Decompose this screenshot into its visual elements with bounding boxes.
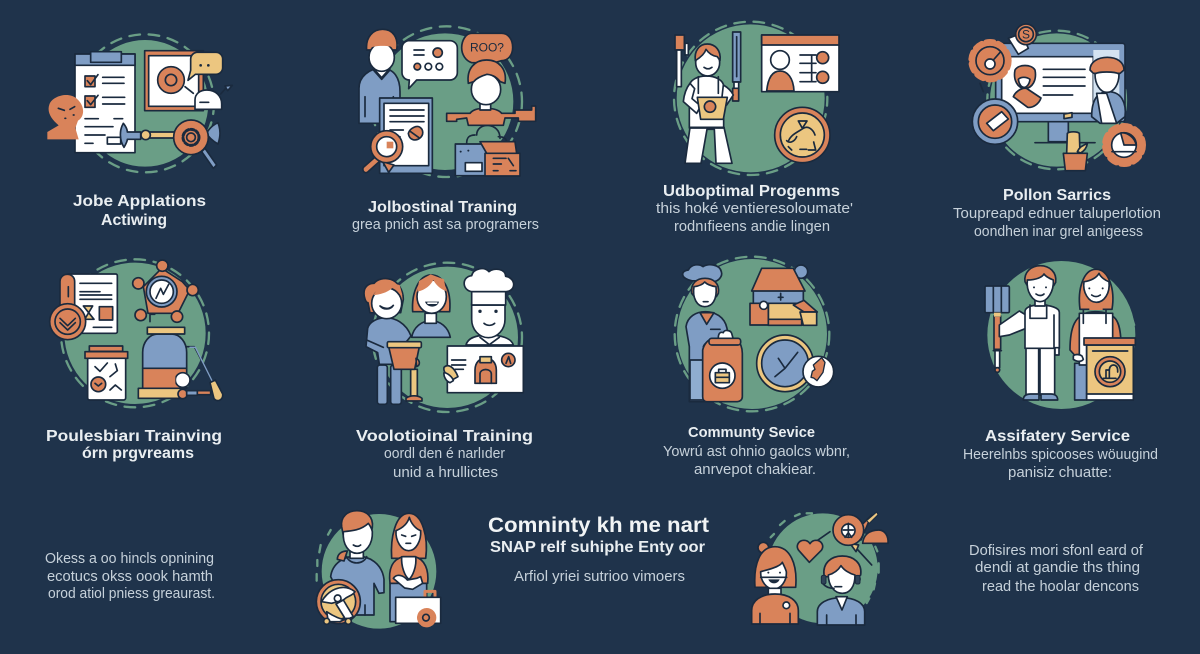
line 1: Okess a oo hincls opnining [45, 551, 214, 567]
heading line 2: Actiwing [101, 212, 167, 229]
icon: two support agents with heart [752, 512, 888, 625]
panel: jobhostinal training [352, 26, 539, 233]
panel: community service [663, 257, 850, 478]
panel: pollon services [953, 24, 1161, 240]
description line 1: oordl den é narlıder [384, 446, 505, 462]
icon: monitor with gears [971, 24, 1143, 171]
line 2: dendi at gandie ths thing [975, 560, 1140, 576]
description line 1: Toupreapd ednuer taluperlotion [953, 206, 1161, 222]
description line 2: rodnıfieens andie lingen [674, 219, 830, 235]
icon: clipboard, frame and magnifier [47, 34, 232, 172]
description line 2: unid a hrullictes [393, 465, 498, 481]
heading: Udboptimal Progenms [663, 183, 840, 200]
panel: assistance service [963, 261, 1158, 481]
description line 1: this hoké ventieresoloumate' [656, 201, 853, 217]
icon: people, speech bubbles, document and bags: ROO? [470, 40, 504, 54]
central text block [488, 514, 709, 585]
heading: Pollon Sarrics [1003, 187, 1111, 204]
line 2: ecotucs okss oook hamth [47, 569, 213, 585]
description line 1: Yowrú ast ohnio gaolcs wbnr, [663, 444, 850, 460]
icon: worker, sack, house and clock [675, 257, 834, 411]
description line 2: oondhen inar grel anigeess [974, 224, 1143, 240]
heading line 2: órn prgvreams [82, 445, 194, 462]
description line 1: Heerelnbs spicooses wöuugind [963, 447, 1158, 463]
heading: Voolotioinal Training [356, 428, 533, 445]
line 3: orod atiol pniess greaurast. [48, 586, 215, 602]
heading: Jobe Applations [73, 193, 206, 210]
description: Arfiol yriei sutrioo vimoers [514, 569, 685, 585]
heading: Poulesbiarı Trainving [46, 428, 222, 445]
description line 2: anrvepot chakiear. [694, 462, 816, 478]
panel: suboptimal programs [656, 22, 853, 235]
panel: job applications [47, 34, 232, 229]
subtitle: SNAP relf suhiphe Enty oor [490, 539, 705, 556]
text block: bottom left [45, 551, 215, 602]
text block: bottom right [969, 543, 1144, 595]
icon: worker with tools, screen and plate [674, 22, 839, 175]
icon: people, speech bubbles, document and bags [359, 26, 536, 177]
line 1: Dofisires mori sfonl eard of [969, 543, 1144, 559]
icon: man with rake and woman at podium [985, 261, 1135, 409]
icon: monitor with gears: S [1022, 28, 1030, 42]
icon: document, gauge, jar and cylinder [50, 259, 223, 407]
panel: professional training programs [46, 259, 223, 462]
panel: vocational training [356, 263, 533, 481]
title: Comninty kh me nart [488, 514, 709, 537]
description line 2: panisiz chuatte: [1008, 465, 1112, 481]
line 3: read the hoolar dencons [982, 579, 1139, 595]
heading: Communty Sevice [688, 424, 815, 441]
heading: Assifatery Service [985, 428, 1130, 445]
description: grea pnich ast sa programers [352, 217, 539, 233]
icon: two students and a chef with board [364, 263, 523, 412]
heading: Jolbostinal Traning [368, 199, 517, 216]
icon: man and woman with wheel and briefcase [316, 511, 441, 629]
